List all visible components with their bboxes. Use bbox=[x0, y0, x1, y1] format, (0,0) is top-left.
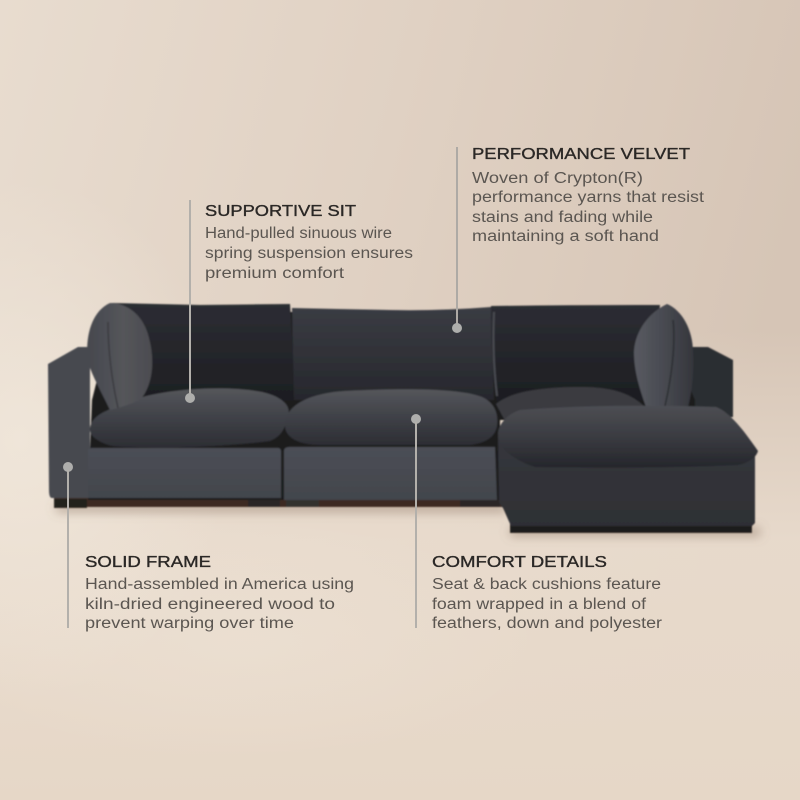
seat cushion: middle bbox=[285, 389, 497, 445]
pillow: right bbox=[634, 304, 693, 407]
heading: SUPPORTIVE SIT bbox=[205, 203, 356, 220]
heading: PERFORMANCE VELVET bbox=[472, 146, 690, 163]
pillow: left bbox=[87, 303, 152, 410]
leader line bbox=[189, 200, 191, 395]
description: spring suspension ensures bbox=[205, 245, 413, 262]
back cushion edge highlight bbox=[493, 312, 497, 396]
description: premium comfort bbox=[205, 265, 345, 282]
back cushion: middle bbox=[292, 307, 494, 400]
description: Hand-pulled sinuous wire bbox=[205, 225, 392, 242]
right arm bbox=[690, 347, 733, 417]
description bbox=[472, 170, 705, 245]
seat cushion: right rear bbox=[496, 387, 646, 430]
ottoman base bbox=[498, 436, 755, 526]
description: Seat & back cushions feature bbox=[432, 576, 661, 593]
description: kiln-dried engineered wood to bbox=[85, 596, 335, 613]
marker dot bbox=[63, 462, 73, 472]
marker dot bbox=[185, 393, 195, 403]
description: prevent warping over time bbox=[85, 615, 294, 632]
leader line bbox=[456, 147, 458, 325]
marker dot bbox=[411, 414, 421, 424]
floor shadow bbox=[56, 504, 760, 536]
description bbox=[85, 576, 354, 632]
heading: SOLID FRAME bbox=[85, 554, 211, 571]
description: Hand-assembled in America using bbox=[85, 576, 354, 593]
sofa bbox=[48, 303, 760, 536]
description: Woven of Crypton(R) bbox=[472, 170, 643, 187]
description: maintaining a soft hand bbox=[472, 228, 659, 245]
leader line bbox=[415, 422, 417, 628]
description: foam wrapped in a blend of bbox=[432, 596, 647, 613]
callout: solid frame bbox=[63, 462, 354, 632]
seat base: left bbox=[88, 448, 281, 498]
description bbox=[432, 576, 662, 632]
left arm bbox=[48, 347, 90, 498]
marker dot bbox=[452, 323, 462, 333]
back cushion: right bbox=[491, 305, 660, 402]
leader line bbox=[67, 470, 69, 628]
seat cushion: left bbox=[90, 388, 289, 448]
description: performance yarns that resist bbox=[472, 189, 705, 206]
seat base: middle bbox=[284, 447, 497, 500]
sofa feet bbox=[54, 498, 752, 533]
callout: supportive sit bbox=[185, 200, 413, 403]
dark sofa underlay bbox=[88, 312, 695, 500]
heading: COMFORT DETAILS bbox=[432, 554, 607, 571]
back cushions bbox=[112, 303, 660, 405]
ottoman cushion bbox=[498, 406, 758, 468]
callout: performance velvet bbox=[452, 146, 705, 333]
description: stains and fading while bbox=[472, 209, 653, 226]
description: feathers, down and polyester bbox=[432, 615, 662, 632]
callout: comfort details bbox=[411, 414, 662, 632]
description bbox=[205, 225, 413, 282]
back cushion: left bbox=[112, 303, 296, 405]
